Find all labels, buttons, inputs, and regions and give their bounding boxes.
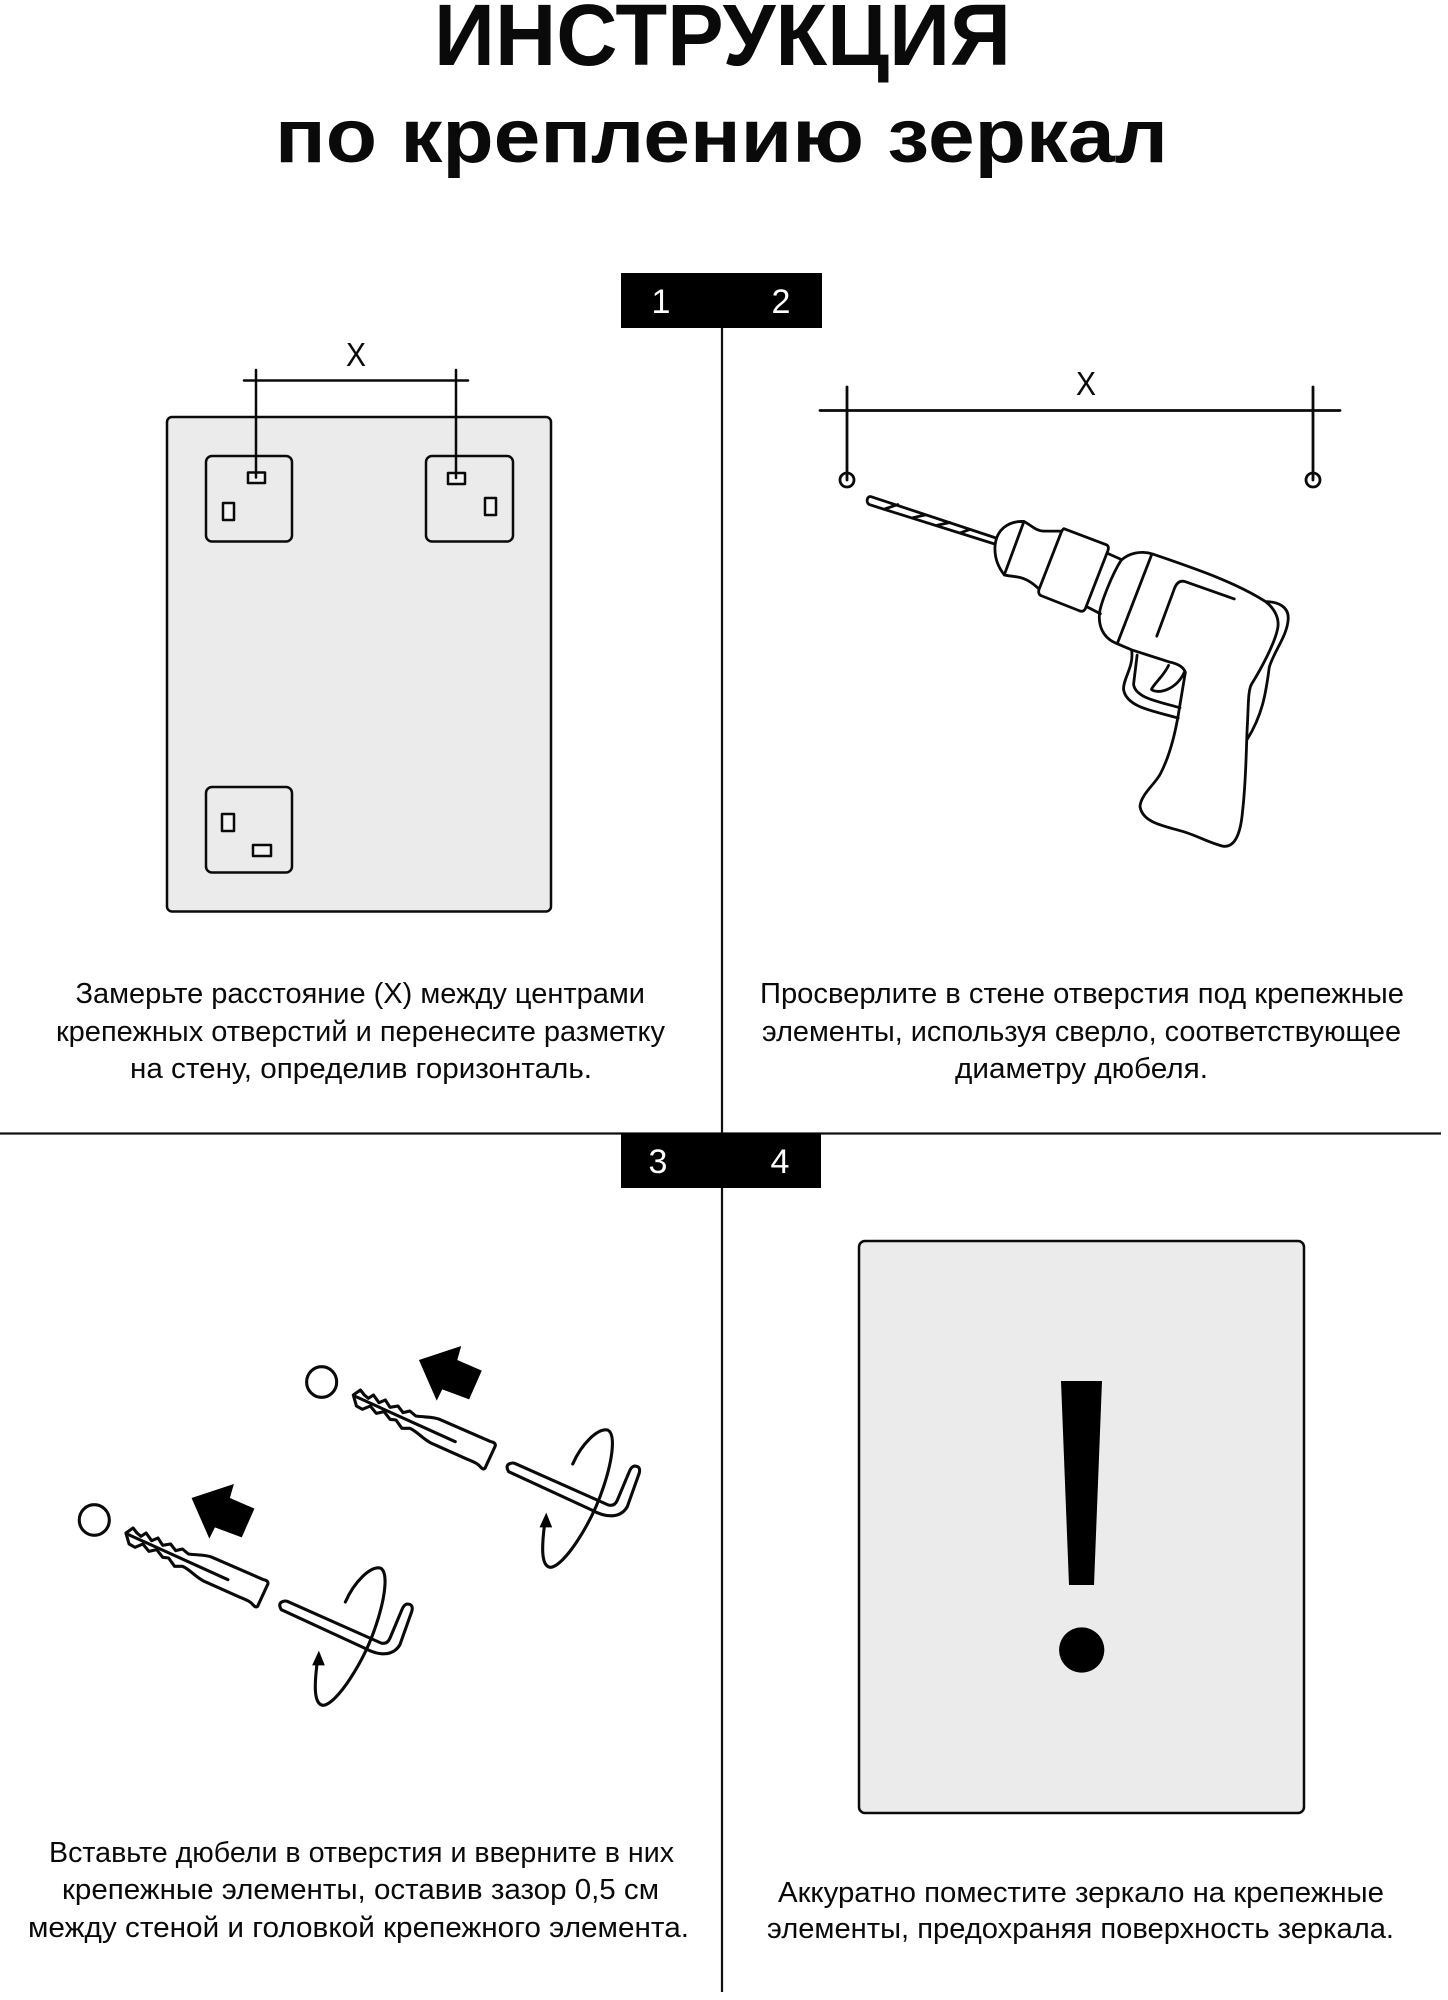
mounting plate top left — [206, 456, 292, 542]
text: step 3 — [28, 1837, 689, 1944]
rotation arrow — [543, 1430, 612, 1567]
panel 3: dowels and screws — [79, 1346, 640, 1705]
upper dowel set — [307, 1346, 640, 1567]
screw hook — [280, 1601, 412, 1654]
step badge 3-4 — [621, 1133, 821, 1188]
text: step 4: элементы, предохраняя поверхность зеркала. — [767, 1913, 1394, 1945]
step badge 3-4: 4 — [771, 1143, 789, 1181]
dimension X: X — [346, 336, 366, 373]
screw hook — [507, 1463, 640, 1516]
icon: drill — [867, 497, 1288, 846]
text: step 3: крепежные элементы, оставив зазор 0,5 см — [62, 1874, 659, 1906]
text: step 3: Вставьте дюбели в отверстия и вверните в них — [49, 1837, 674, 1869]
dowel — [353, 1390, 495, 1469]
mirror back — [167, 417, 551, 912]
panel 2: drilling — [820, 365, 1340, 846]
step badge 1-2: 1 — [652, 283, 670, 321]
dimension X with hole marks: X — [1076, 365, 1096, 402]
text: step 4: Аккуратно поместите зеркало на крепежные — [778, 1877, 1384, 1909]
arrow — [192, 1484, 254, 1539]
step badge 3-4: 3 — [649, 1143, 667, 1181]
mounting plate top right — [426, 456, 513, 542]
step badge 1-2: 2 — [772, 283, 790, 321]
panel 1: mirror measurement — [167, 336, 551, 912]
text: step 2: элементы, используя сверло, соответствующее — [762, 1016, 1401, 1048]
lower dowel set — [79, 1484, 412, 1705]
dimension X with hole marks — [820, 365, 1340, 487]
rotation arrow — [315, 1568, 385, 1705]
text: step 1 — [56, 978, 665, 1085]
title line 2: по креплению зеркал — [275, 94, 1168, 179]
step badge 1-2 — [621, 273, 822, 328]
text: step 1: на стену, определив горизонталь. — [130, 1053, 592, 1085]
text: step 1: Замерьте расстояние (X) между центрами — [76, 978, 645, 1010]
hole — [307, 1367, 337, 1397]
dowel — [126, 1528, 268, 1607]
text: step 3: между стеной и головкой крепежного элемента. — [28, 1912, 689, 1944]
hole — [79, 1505, 109, 1535]
mounting plate bottom left — [206, 787, 292, 872]
text: step 2 — [760, 978, 1404, 1085]
title — [275, 0, 1168, 179]
mirror — [859, 1241, 1304, 1813]
text: step 2: Просверлите в стене отверстия под крепежные — [760, 978, 1404, 1010]
text: step 2: диаметру дюбеля. — [955, 1053, 1208, 1085]
arrow — [419, 1346, 482, 1401]
panel 4: mirror with warning — [859, 1241, 1304, 1813]
text: step 4 — [767, 1877, 1394, 1945]
icon: exclamation mark — [1059, 1381, 1104, 1673]
text: step 1: крепежных отверстий и перенесите разметку — [56, 1016, 665, 1048]
